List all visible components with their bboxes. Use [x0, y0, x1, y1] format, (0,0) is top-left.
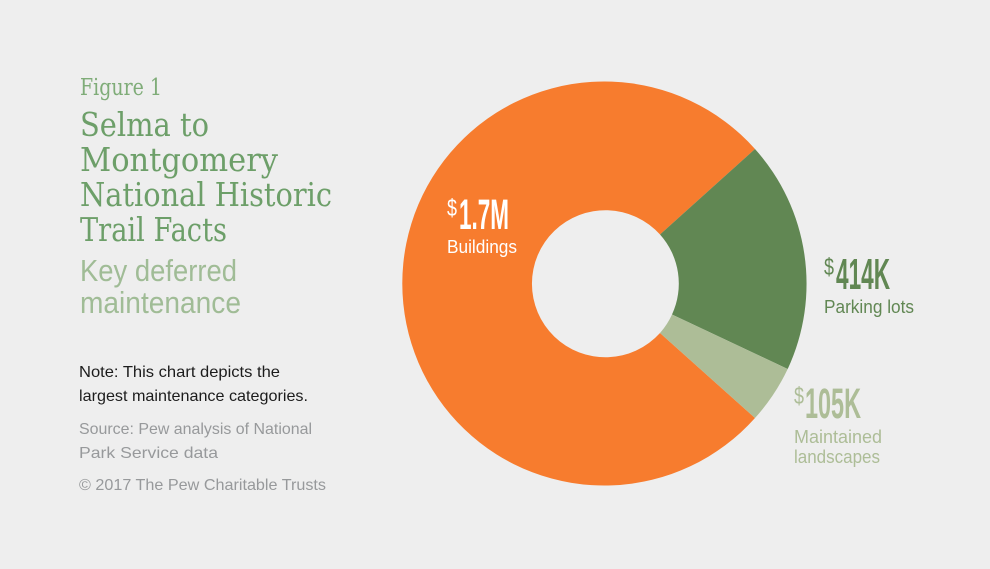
subtitle: Key deferred [80, 253, 237, 288]
source: Park Service data [79, 445, 218, 462]
label: maintained landscapes: $ [794, 383, 804, 410]
label: buildings: Buildings [447, 237, 517, 257]
label: maintained landscapes: 105K [805, 380, 861, 428]
note: largest maintenance categories. [79, 388, 308, 405]
figure label: Figure 1 [80, 75, 162, 101]
title: Montgomery [80, 140, 278, 179]
label: maintained landscapes [794, 380, 882, 467]
heading block [80, 75, 332, 249]
label: parking lots: Parking lots [824, 297, 914, 317]
label: parking lots [824, 250, 914, 317]
label: parking lots: $ [824, 254, 834, 281]
source [79, 421, 312, 462]
source: Source: Pew analysis of National [79, 421, 312, 438]
title: Trail Facts [80, 210, 227, 249]
label: maintained landscapes: Maintained [794, 427, 882, 447]
copyright: © 2017 The Pew Charitable Trusts [79, 477, 326, 494]
label: buildings: $ [447, 195, 457, 222]
title: Selma to [80, 105, 209, 144]
donut chart [402, 81, 807, 485]
label: maintained landscapes: landscapes [794, 447, 880, 467]
segment: maintained landscapes [660, 314, 788, 418]
segment: buildings [402, 81, 755, 485]
note: Note: This chart depicts the [79, 364, 280, 381]
label: buildings: 1.7M [459, 191, 509, 239]
title [80, 105, 332, 249]
title: National Historic [80, 175, 332, 214]
subtitle [80, 253, 241, 320]
label: parking lots: 414K [836, 250, 890, 299]
segment: parking lots [660, 149, 807, 369]
label: buildings [447, 191, 517, 257]
note [79, 364, 308, 405]
subtitle: maintenance [80, 285, 241, 320]
